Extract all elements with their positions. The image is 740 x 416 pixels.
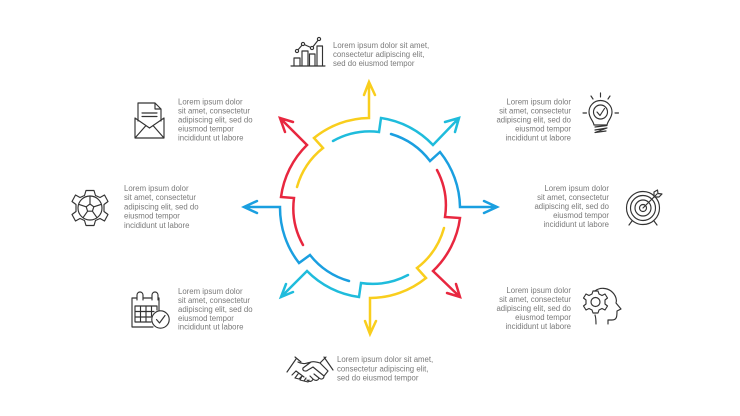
text: lower right: eiusmod tempor [515, 313, 571, 322]
text: upper left [178, 98, 253, 142]
text: left: sit amet, consectetur [124, 193, 196, 202]
text: upper right: Lorem ipsum dolor [506, 98, 571, 106]
text: right: Lorem ipsum dolor [544, 184, 609, 193]
arrow: upper left red [280, 118, 307, 245]
text: lower right: sit amet, consectetur [499, 295, 571, 304]
arrow: bottom yellow [365, 228, 444, 334]
icon: target with arrow [626, 190, 662, 225]
text: left: eiusmod tempor [124, 212, 180, 220]
text: right: sit amet, consectetur [537, 193, 609, 202]
text: lower left: Lorem ipsum dolor [178, 287, 243, 296]
text: left: adipiscing elit, sed do [124, 202, 199, 212]
text: left [124, 184, 199, 230]
text: upper left: sit amet, consectetur [178, 106, 250, 116]
text: top [333, 41, 429, 68]
arrow: lower right red [433, 170, 460, 297]
arrow: left blue [244, 201, 349, 281]
text: left: Lorem ipsum dolor [124, 184, 189, 193]
arrow: upper right cyan [333, 118, 459, 145]
text: lower left: eiusmod tempor [178, 314, 234, 323]
icon: handshake [287, 357, 333, 382]
text: upper left: eiusmod tempor [178, 124, 234, 134]
arrow: right blue [391, 134, 497, 213]
icon: light bulb [583, 93, 618, 132]
text: lower right: adipiscing elit, sed do [496, 304, 572, 313]
text: upper left: Lorem ipsum dolor [178, 98, 243, 106]
text: top: sed do eiusmod tempor [333, 59, 415, 68]
text: lower right: incididunt ut labore [506, 322, 571, 331]
text: right [534, 184, 610, 229]
text: bottom: consectetur adipiscing elit, [337, 364, 428, 374]
text: upper right: incididunt ut labore [506, 134, 571, 142]
text: lower right: Lorem ipsum dolor [506, 286, 571, 295]
text: upper right [496, 98, 572, 142]
arrow: top yellow [297, 82, 375, 187]
text: bottom [337, 355, 433, 382]
text: right: adipiscing elit, sed do [534, 202, 610, 211]
text: upper left: adipiscing elit, sed do [178, 116, 253, 124]
arrow: lower left cyan [281, 271, 408, 297]
text: lower right [496, 286, 572, 331]
text: top: consectetur adipiscing elit, [333, 50, 424, 59]
text: lower left: adipiscing elit, sed do [178, 305, 253, 314]
text: lower left [178, 287, 253, 332]
text: right: incididunt ut labore [544, 220, 609, 229]
text: right: eiusmod tempor [553, 211, 609, 220]
icon: gear [72, 190, 108, 226]
text: bottom: sed do eiusmod tempor [337, 374, 419, 382]
text: top: Lorem ipsum dolor sit amet, [333, 41, 429, 50]
circular arrow diagram [244, 82, 497, 334]
text: lower left: incididunt ut labore [178, 322, 243, 332]
text: upper left: incididunt ut labore [178, 134, 243, 142]
text: upper right: adipiscing elit, sed do [496, 116, 572, 124]
text: bottom: Lorem ipsum dolor sit amet, [337, 355, 433, 364]
icon: envelope with document [135, 103, 164, 138]
icon: bar chart [291, 37, 325, 66]
icon: calendar with check [132, 292, 169, 328]
icon: head with gear [584, 288, 621, 324]
text: upper right: eiusmod tempor [515, 124, 571, 134]
text: upper right: sit amet, consectetur [499, 106, 571, 116]
text: lower left: sit amet, consectetur [178, 296, 250, 305]
text: left: incididunt ut labore [124, 221, 189, 230]
